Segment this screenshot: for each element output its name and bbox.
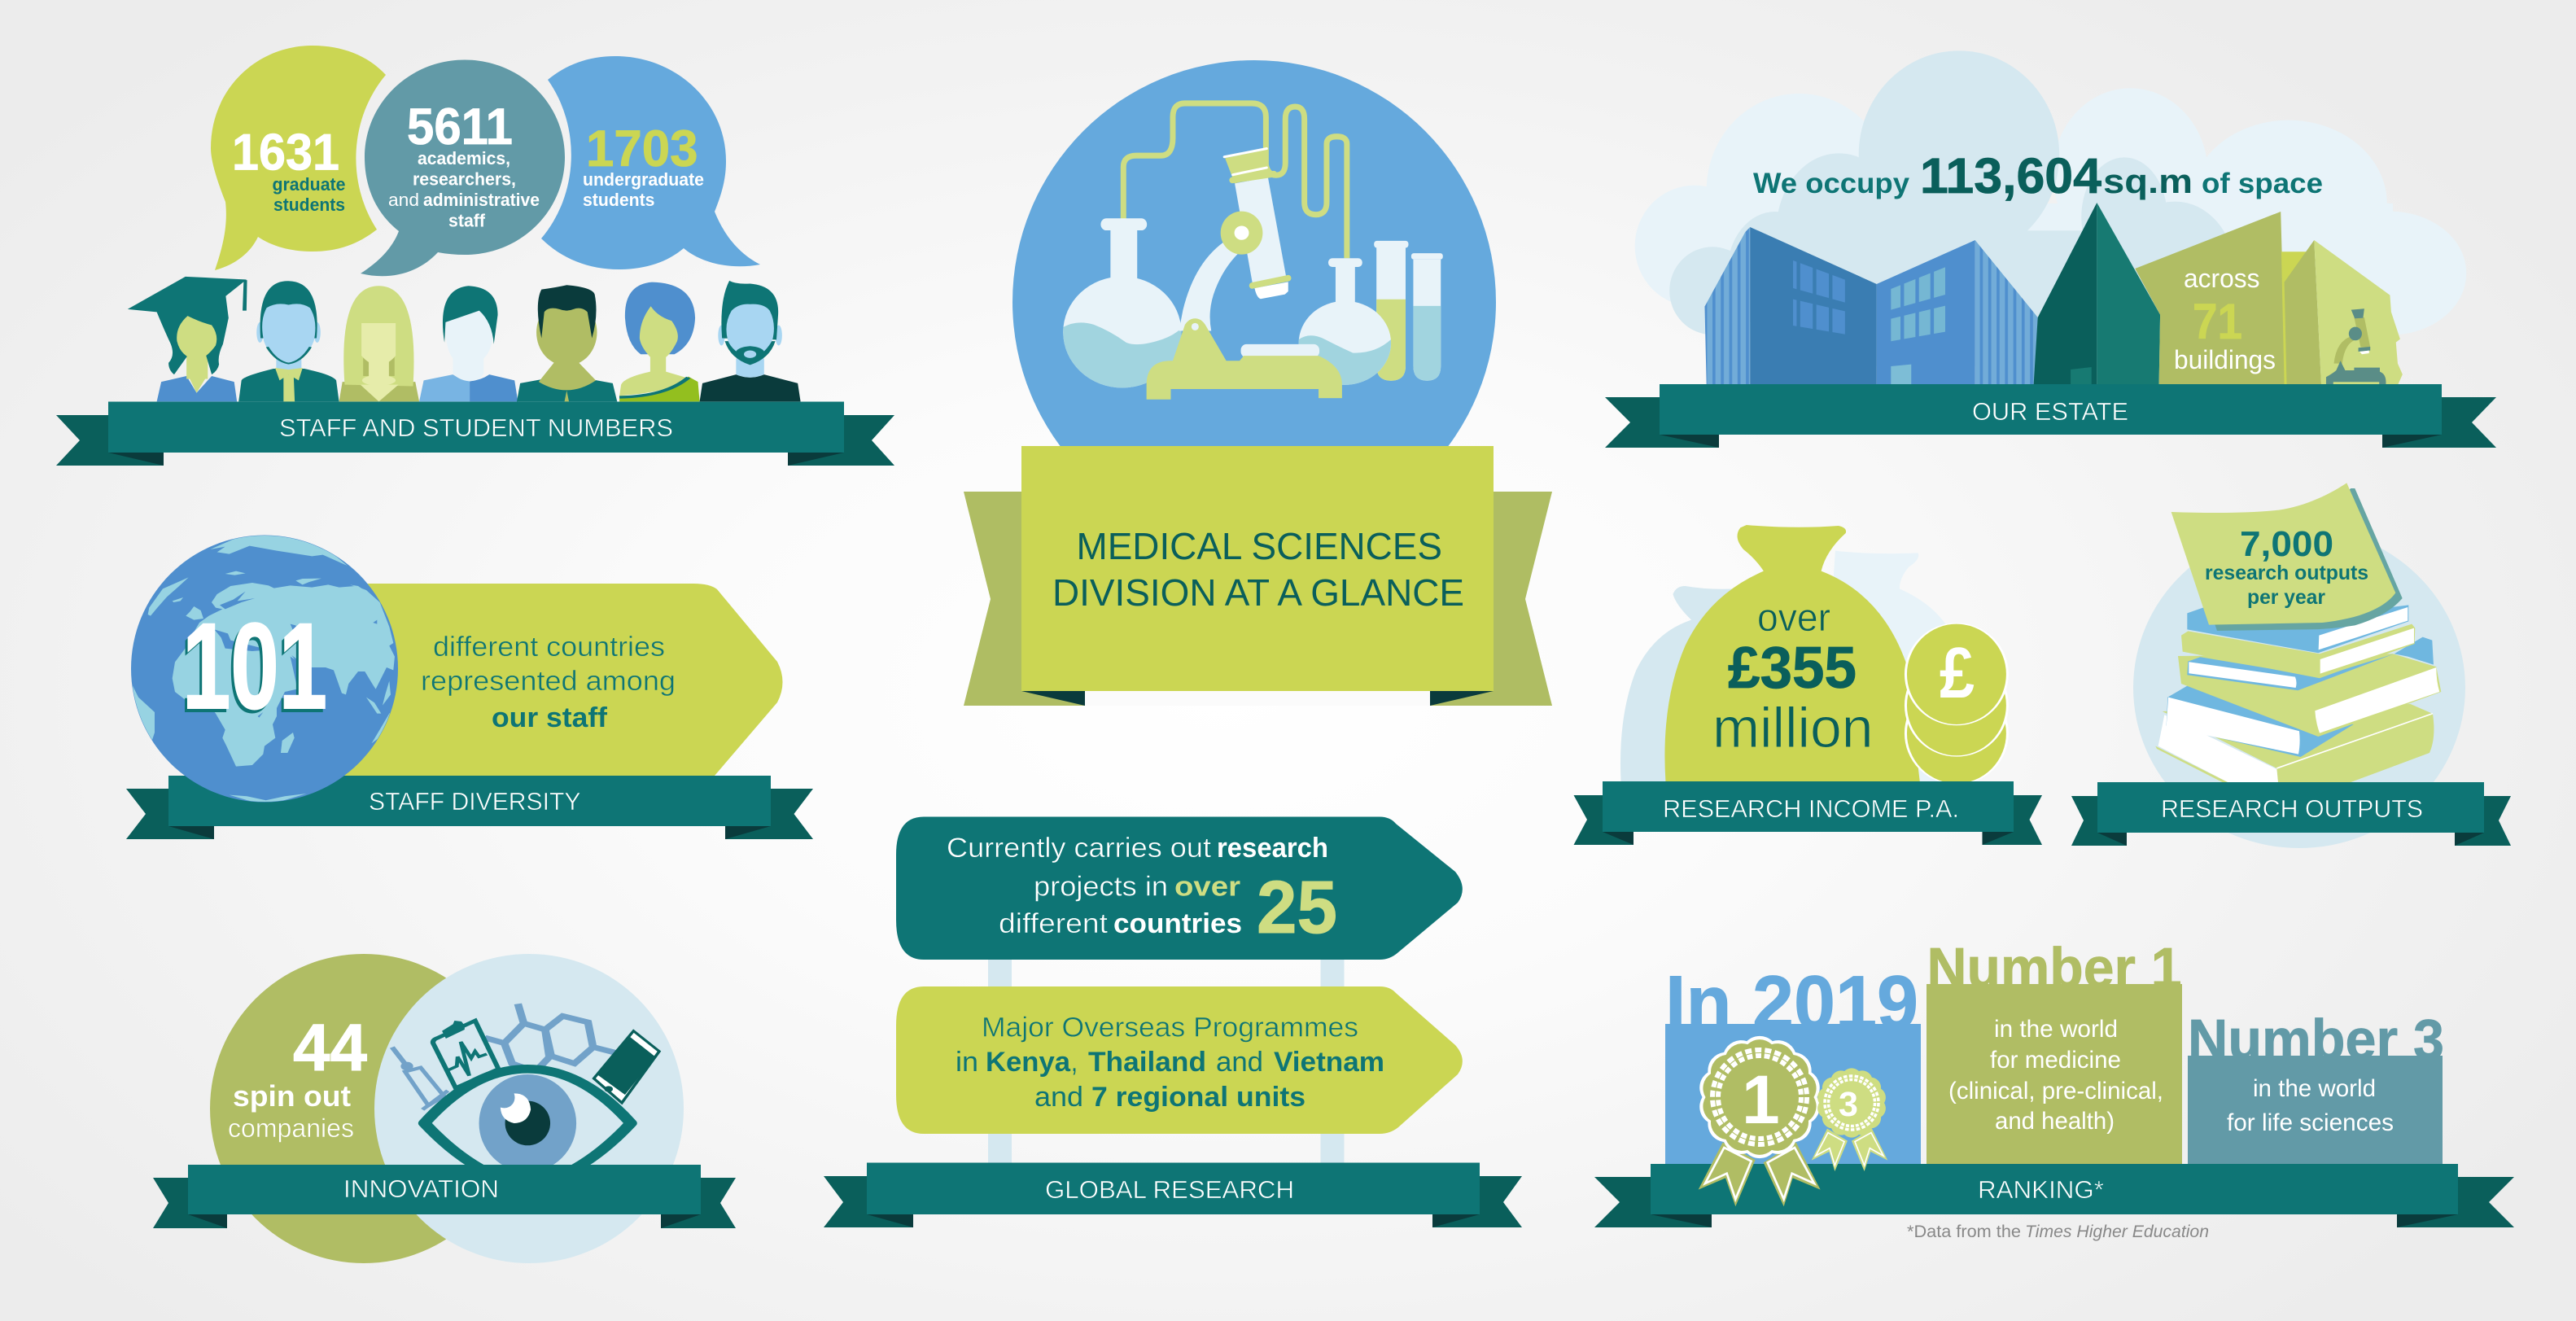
text: over £355 million [1712,597,1874,759]
text: projects in over 25 countries: projects in [1034,871,1168,902]
medal: rank 3 [1812,1068,1887,1171]
sign: overseas programmes [896,986,1463,1134]
panel: title and lab illustration [964,60,1552,706]
icon: phone [594,1031,659,1103]
stat: 1631 graduate students: graduate [272,174,345,195]
paper sheet [2171,483,2403,631]
panel: staff and student numbers [56,46,894,466]
icon: molecule [485,1004,615,1072]
text: projects in over 25 countries: research [1217,833,1328,864]
stat: 1703 undergraduate students: students [583,190,654,210]
arrow sign: diversity [326,584,783,776]
text: overseas programmes: 7 regional units [1091,1082,1305,1113]
text: overseas programmes: Kenya [986,1047,1071,1078]
text: we occupy 113,604 sq.m of space: 113,604 [1920,148,2101,203]
column: number 1: (clinical, pre-clinical, [1948,1078,2163,1104]
column: number 3: in the world [2253,1075,2376,1102]
figure: seven staff and students [128,277,801,401]
stat: 1703 undergraduate students [583,120,704,210]
text: across 71 buildings: across [2184,264,2259,293]
text: we occupy 113,604 sq.m of space: of space [2202,168,2323,199]
text: overseas programmes: and [1216,1047,1263,1078]
icon: pound sign on coin: £ [1940,632,1975,713]
banner: research income [1574,781,2042,845]
stat: 1631 graduate students: students [273,195,345,215]
text: projects in over 25 countries [947,833,1337,949]
test tube with blue liquid [1411,253,1443,381]
banner: staff diversity [126,776,813,839]
sign posts [988,952,1345,1164]
venn circle: olive [210,954,518,1263]
text: different countries represented among our staff [421,632,676,733]
text: 7,000 research outputs per year: research outputs [2205,562,2368,584]
text: projects in over 25 countries: over [1174,871,1240,902]
banner: global research: GLOBAL RESEARCH [1045,1175,1294,1204]
title text: MEDICAL SCIENCES [1076,525,1442,567]
venn circle: pale blue [374,954,684,1263]
banner: our estate: OUR ESTATE [1972,397,2128,426]
text: 7,000 research outputs per year [2205,524,2368,609]
column: number 1 [1927,984,2182,1166]
text: we occupy 113,604 sq.m of space [1753,148,2323,203]
stat: 5611 academics, researchers, administrative staff: researchers, [413,169,516,189]
panel: research outputs [2071,483,2511,848]
book: top blue [2187,605,2408,653]
column: number 1: for medicine [1990,1047,2121,1074]
text: we occupy 113,604 sq.m of space: We occupy [1753,168,1910,199]
text: we occupy 113,604 sq.m of space: sq.m [2103,162,2193,200]
banner: staff diversity: STAFF DIVERSITY [369,787,581,816]
text: overseas programmes: Vietnam [1274,1047,1384,1078]
title text [1052,525,1464,614]
icon: coin stack [1905,623,2007,784]
footnote: data source [1907,1223,2209,1241]
footnote: data source: Times Higher Education [2025,1223,2209,1241]
text: overseas programmes [956,1013,1384,1113]
left round flask [1057,218,1183,393]
book: bottom [2155,704,2434,783]
text: different countries represented among our staff: our staff [492,702,608,733]
stat: 5611 academics, researchers, administrative staff: staff [448,210,486,231]
banner: research income: RESEARCH INCOME P.A. [1663,794,1959,823]
text: over £355 million: £355 [1728,636,1857,701]
stat: 101: 101 [182,597,327,734]
person: woman with blue hair [619,282,700,401]
panel: staff diversity [126,535,813,839]
globe icon [130,535,398,806]
stat: 5611 academics, researchers, administrative staff: 5611 [407,98,513,155]
speech bubble: academics and staff [361,60,565,276]
text: overseas programmes: , [1071,1047,1078,1078]
text: overseas programmes: and [1034,1082,1083,1113]
medal: rank 1: 1 [1742,1061,1780,1138]
stat: 44 spin out companies: companies [228,1113,354,1143]
text: across 71 buildings: buildings [2174,345,2276,374]
person: bearded man [700,281,801,401]
stat: 1631 graduate students: 1631 [232,124,339,181]
panel: our estate [1605,50,2496,448]
text: 7,000 research outputs per year: per year [2247,586,2325,609]
book: blue behind [2394,637,2434,665]
banner: ranking: RANKING* [1978,1175,2104,1204]
person: short dark hair, two-tone top [419,286,518,401]
stat: 1631 graduate students [232,124,345,215]
book: upper green [2181,624,2415,678]
illustration: stack of books [2155,483,2441,783]
building: blue block [1704,227,2038,385]
banner: staff and student numbers: STAFF AND STUDENT NUMBERS [279,413,673,442]
banner: ranking [1594,1164,2514,1227]
text: overseas programmes: Major Overseas Programmes [982,1013,1358,1043]
book: large green [2178,654,2441,737]
banner: innovation [153,1165,736,1228]
speech bubble: graduate students [211,46,386,270]
text: different countries represented among our staff: different countries [433,632,665,663]
icon: money bags [1620,525,2007,784]
panel: ranking [1594,936,2514,1241]
column: number 1: and health) [1995,1108,2115,1135]
text: different countries represented among our staff: represented among [421,666,676,697]
illustration: buildings [1704,203,2403,385]
heading: In 2019: In 2019 [1665,960,1918,1045]
text: projects in over 25 countries: different [999,908,1109,939]
icon: clipboard with pulse [433,1021,498,1088]
panel: global research [824,817,1522,1227]
banner: our estate [1605,384,2496,448]
medal: rank 3: 3 [1839,1085,1858,1124]
text: over £355 million: over [1757,597,1830,640]
heading: Number 3: Number 3 [2188,1008,2444,1071]
icon: eye [425,1069,631,1174]
microscope [1147,149,1342,400]
background ellipse [2133,527,2465,848]
stat: 5611 academics, researchers, administrative staff: and [388,190,419,210]
text: over £355 million: million [1712,696,1874,759]
stat: 1703 undergraduate students: undergraduate [583,169,704,190]
text: across 71 buildings [2174,264,2276,374]
stat: 101: 101 [180,601,325,737]
text: projects in over 25 countries: countries [1113,908,1242,939]
panel: innovation [153,954,736,1263]
column: 2019 [1665,1024,1921,1166]
title text: DIVISION AT A GLANCE [1052,571,1464,614]
column: number 3: for life sciences [2227,1109,2394,1136]
person: dark hair, olive skin [517,285,617,401]
text: overseas programmes: in [956,1047,978,1078]
panel: research income [1574,525,2042,845]
person: graduate [128,277,247,401]
sign: research projects [896,817,1463,960]
heading: Number 1: Number 1 [1927,936,2181,999]
stat: 1703 undergraduate students: 1703 [586,120,698,177]
illustration: laboratory equipment [1057,103,1443,400]
medal: rank 1 [1699,1036,1821,1206]
footnote: data source: *Data from the [1907,1223,2021,1241]
test tube with green liquid [1374,241,1408,381]
person: man with tie [238,281,339,401]
column: number 1: in the world [1994,1016,2118,1043]
banner: research outputs: RESEARCH OUTPUTS [2161,794,2423,823]
text: projects in over 25 countries: Currently carries out [947,833,1212,864]
person: woman with long blonde hair [339,286,419,401]
text: overseas programmes: Thailand [1088,1047,1206,1078]
speech bubble: undergraduate students [541,56,760,269]
column: number 3 [2188,1056,2443,1166]
banner: research outputs [2071,782,2511,846]
cloud background [1635,50,2466,366]
text: projects in over 25 countries: 25 [1257,866,1337,949]
blue circle background [1012,60,1496,544]
stat: 44 spin out companies: spin out [233,1079,351,1113]
building: teal spire [2034,203,2160,385]
stat: 5611 academics, researchers, administrative staff: administrative [423,190,540,210]
banner: global research [824,1162,1522,1227]
banner: innovation: INNOVATION [343,1174,499,1203]
stat: 5611 academics, researchers, administrative staff [388,98,540,231]
stat: 5611 academics, researchers, administrative staff: academics, [418,148,510,168]
text: across 71 buildings: 71 [2193,294,2242,349]
glass tubing [1123,103,1347,258]
icons: eye with science objects [392,1004,659,1174]
title ribbon [964,446,1552,706]
book: second, blue [2167,686,2354,757]
building: olive block [2135,212,2403,385]
right round flask [1297,258,1393,389]
icon: syringe [392,1048,448,1109]
icon: small microscope [2326,308,2386,385]
text: 7,000 research outputs per year: 7,000 [2240,524,2333,564]
stat: 44 spin out companies: 44 [293,1011,367,1085]
banner: staff and student numbers [56,402,894,466]
stat: 44 spin out companies [228,1011,367,1143]
